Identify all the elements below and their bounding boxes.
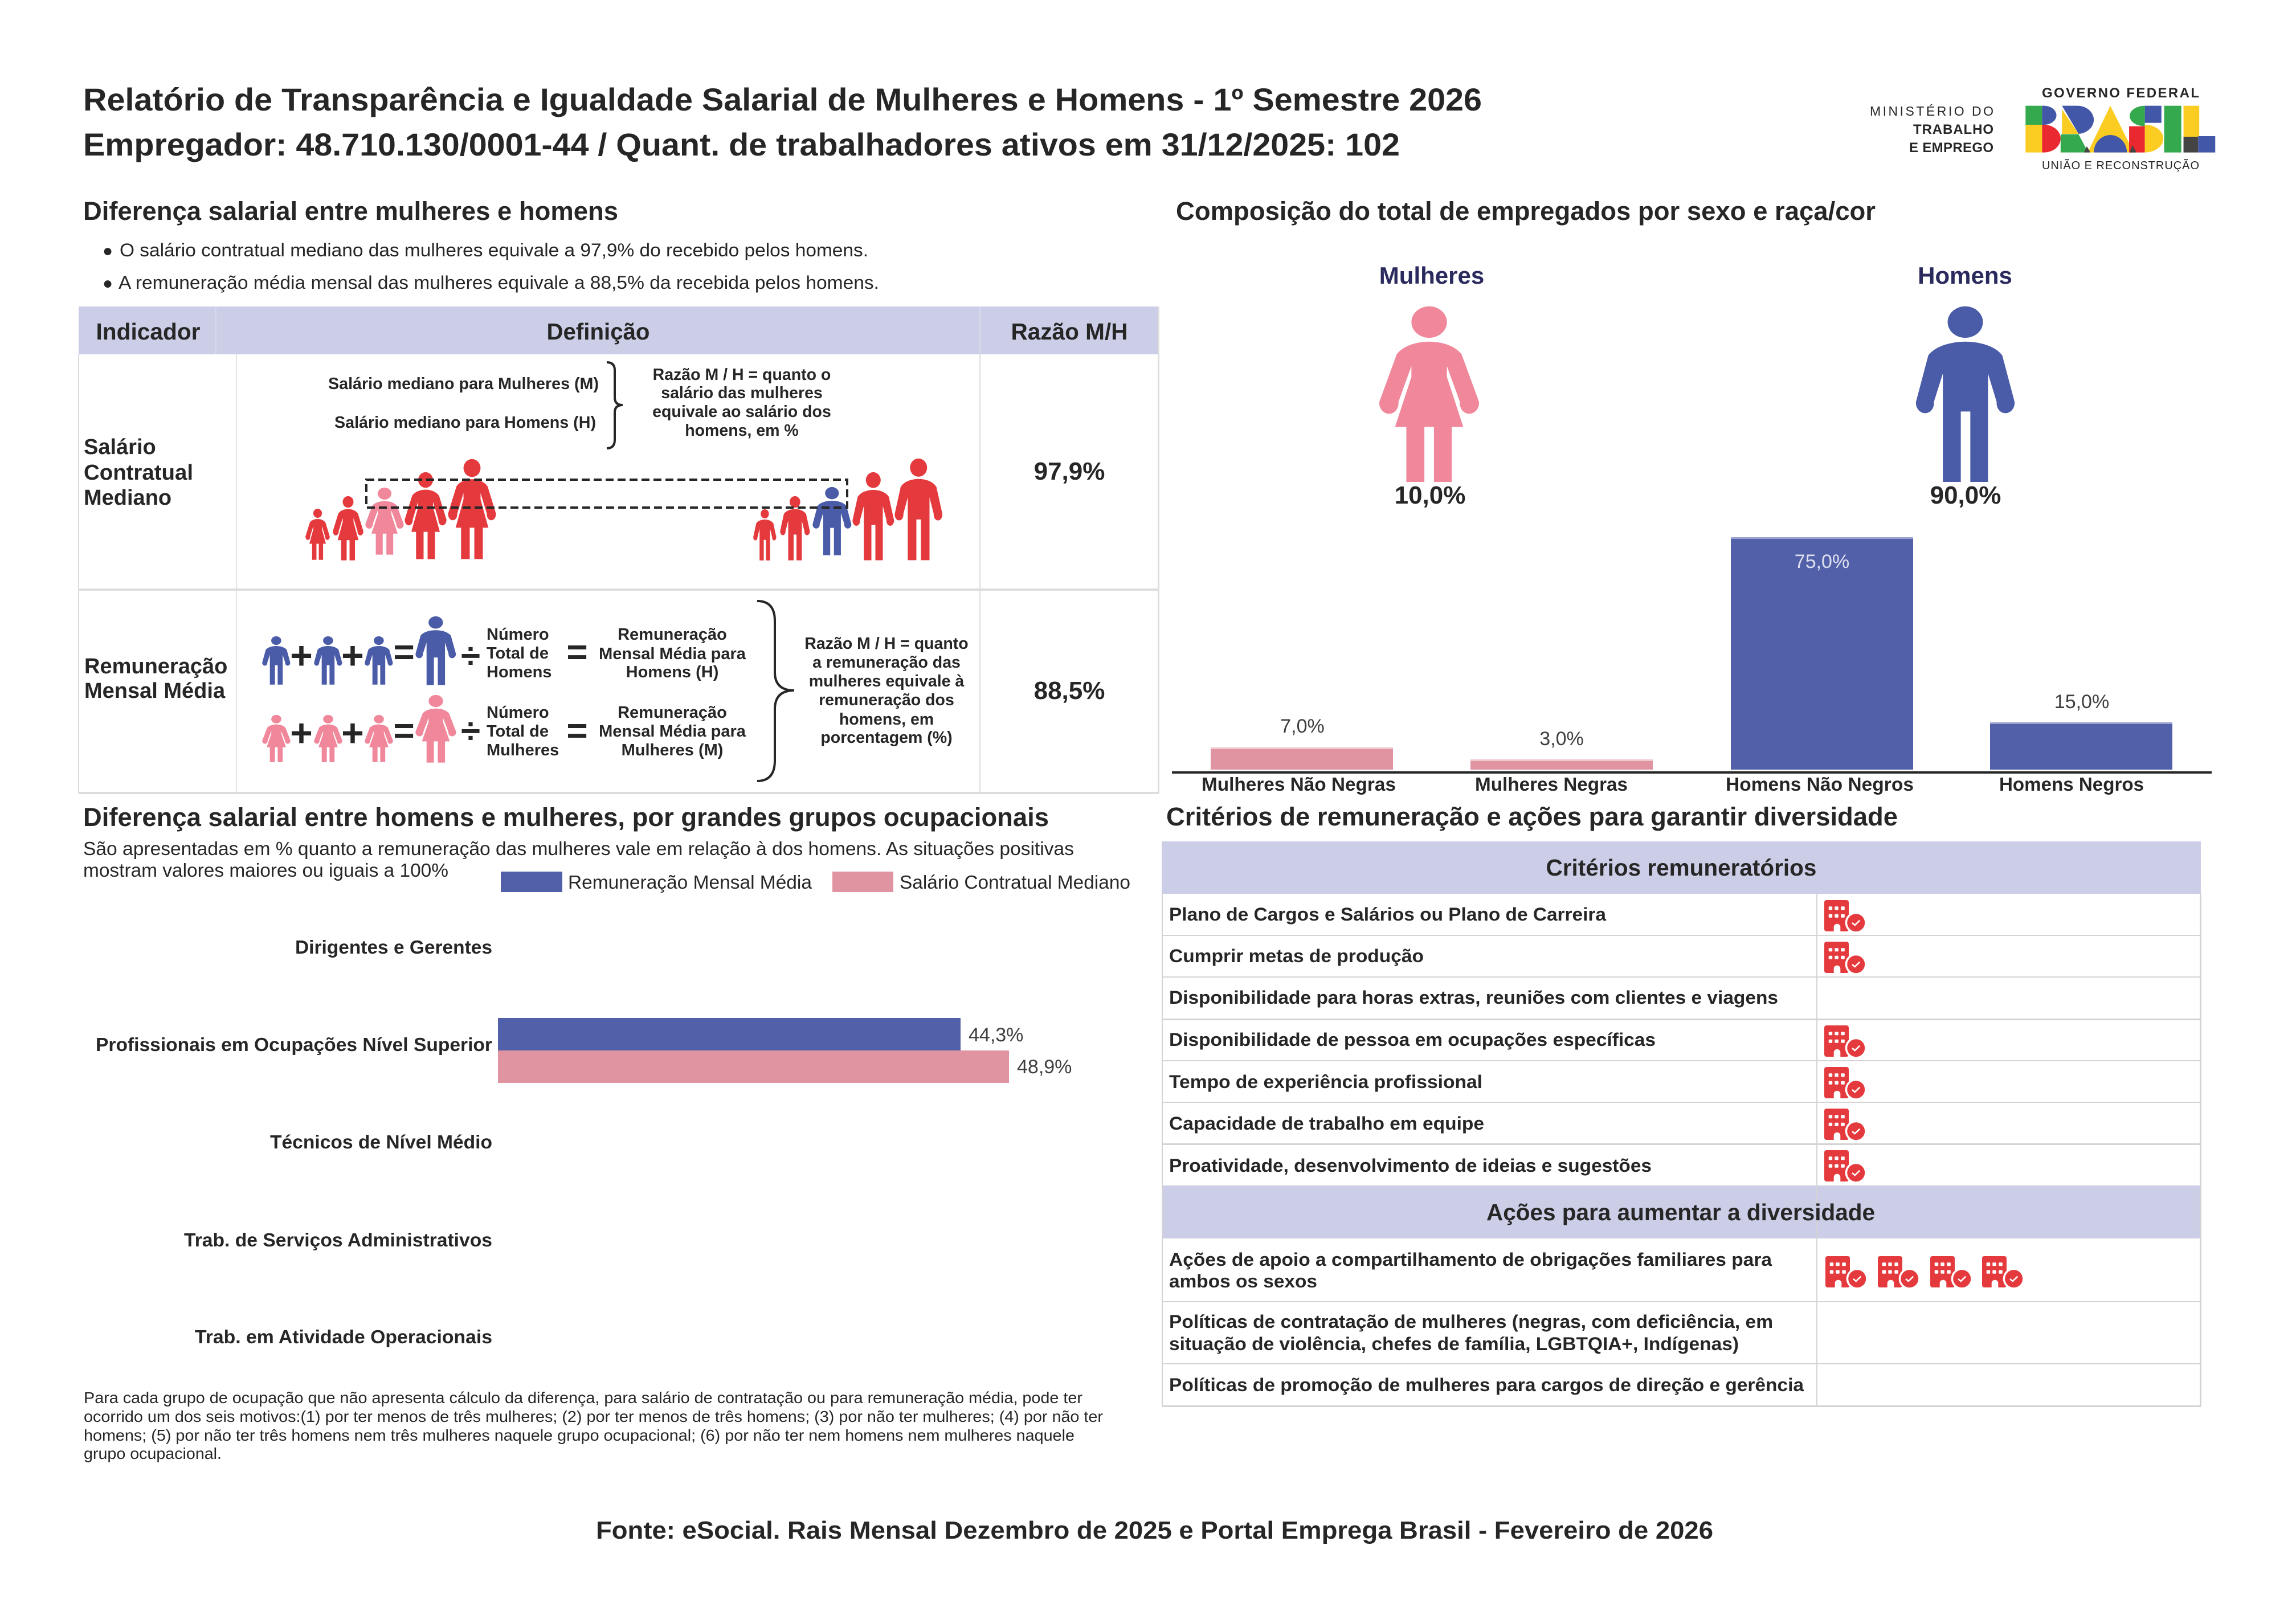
bar: mulheres não negras <box>1211 715 1393 770</box>
table header <box>79 306 1159 354</box>
row: cumprir metas <box>1169 942 1867 975</box>
definition: ratio text median: homens, em % <box>685 422 799 440</box>
bar: homens negros: 15,0% <box>2054 691 2109 713</box>
bar: remuneração 44,3%: 44,3% <box>969 1024 1023 1046</box>
formula: women: Mulheres <box>487 741 559 759</box>
row: políticas de contratação: Políticas de contratação de mulheres (negras, com deficiência, em <box>1169 1311 1773 1332</box>
row label: remuneração mensal média <box>84 655 227 703</box>
formula: men: + <box>341 634 364 677</box>
row: disponibilidade horas extras: Disponibilidade para horas extras, reuniões com clientes e viagens <box>1169 987 1778 1008</box>
row: tempo de experiência: Tempo de experiência profissional <box>1169 1072 1482 1092</box>
formula: men: + <box>290 634 313 677</box>
definition: ratio text average: a remuneração das <box>812 653 961 672</box>
formula: men: Total de <box>487 644 549 663</box>
footnote <box>84 1389 1103 1462</box>
bar: salário 48,9% <box>498 1050 1072 1083</box>
category labels <box>96 937 492 1347</box>
table header: Indicador <box>96 318 201 345</box>
value: 97,9%: 97,9% <box>1034 457 1105 485</box>
panel: homens pictogram: Homens <box>1918 262 2012 289</box>
heading: composição: Composição do total de empregados por sexo e raça/cor <box>1176 197 1876 226</box>
value: 88,5%: 88,5% <box>1034 677 1105 705</box>
bar: homens negros <box>1990 691 2172 770</box>
row: disponibilidade ocupações: Disponibilidade de pessoa em ocupações específicas <box>1169 1029 1656 1050</box>
row: tempo de experiência <box>1169 1067 1867 1101</box>
category labels: Trab. de Serviços Administrativos <box>184 1229 492 1250</box>
brace: average <box>757 601 794 781</box>
row: disponibilidade ocupações <box>1169 1025 1867 1059</box>
header: ações para aumentar a diversidade: Ações para aumentar a diversidade <box>1486 1199 1875 1225</box>
formula: women: Total de <box>487 722 549 741</box>
bar: mulheres negras: 3,0% <box>1539 728 1584 750</box>
definition: ratio text median: salário das mulheres <box>661 384 823 402</box>
formula: men <box>262 616 746 685</box>
row label: salário contratual mediano: Mediano <box>84 486 171 510</box>
footnote: homens; (5) por não ter três homens nem três mulheres naquele grupo ocupacional; (6) por não ter nem homens nem mulheres naquele <box>84 1426 1075 1444</box>
row label: remuneração mensal média: Mensal Média <box>84 679 226 703</box>
panel: indicator table <box>78 306 1159 794</box>
definition: median labels: Salário mediano para Mulheres (M) <box>328 375 599 393</box>
logo: governo federal brasil <box>2025 85 2215 172</box>
bar chart: composition <box>1172 537 2212 795</box>
formula: women: Remuneração <box>618 704 727 722</box>
legend <box>501 872 1130 893</box>
formula: women: Número <box>487 704 549 722</box>
row: plano de cargos: Plano de Cargos e Salários ou Plano de Carreira <box>1169 904 1606 925</box>
row: ações de apoio: ambos os sexos <box>1169 1271 1317 1291</box>
logo: ministério: TRABALHO <box>1913 122 1993 137</box>
category labels: Trab. em Atividade Operacionais <box>195 1326 492 1347</box>
row: políticas de contratação <box>1169 1311 1773 1354</box>
definition: ratio text average: porcentagem (%) <box>820 729 953 747</box>
formula: men: Mensal Média para <box>599 645 746 663</box>
category labels: Mulheres Não Negras <box>1202 774 1396 795</box>
heading: diferença salarial: Diferença salarial entre mulheres e homens <box>83 197 618 226</box>
bar: mulheres negras <box>1470 728 1653 770</box>
definition: ratio text median: Razão M / H = quanto o <box>653 366 831 384</box>
formula: women: = <box>393 710 415 751</box>
category labels: Homens Negros <box>1999 774 2144 795</box>
title: Relatório de Transparência e Igualdade Salarial de Mulheres e Homens - 1º Semestre 2026 <box>83 81 1482 117</box>
formula: women: + <box>341 712 364 755</box>
heading: grupos ocupacionais: Diferença salarial entre homens e mulheres, por grandes grupos ocupacionais <box>83 803 1049 832</box>
row: capacidade de trabalho: Capacidade de trabalho em equipe <box>1169 1113 1484 1134</box>
description text: São apresentadas em % quanto a remuneração das mulheres vale em relação à dos homens. As situações positivas <box>83 838 1074 859</box>
icons: men lined up <box>753 459 942 561</box>
bullet list: ● <box>103 274 113 293</box>
row: capacidade de trabalho <box>1169 1109 1867 1142</box>
dashed median box <box>366 480 847 508</box>
definition: ratio text average: remuneração dos <box>819 691 954 709</box>
bar chart: occupational groups <box>96 937 1072 1347</box>
definition: median labels <box>328 375 599 432</box>
formula: men: = <box>393 631 415 672</box>
definition: median labels: Salário mediano para Homens (H) <box>334 414 596 432</box>
row label: salário contratual mediano <box>84 435 193 510</box>
row label: salário contratual mediano: Salário <box>84 435 156 459</box>
row: ações de apoio: Ações de apoio a compartilhamento de obrigações familiares para <box>1169 1249 1772 1270</box>
formula: women <box>262 695 746 763</box>
panel: mulheres pictogram <box>1379 262 1484 509</box>
bar: salário 48,9%: 48,9% <box>1017 1056 1072 1078</box>
panel: homens pictogram: 90,0% <box>1930 481 2001 509</box>
formula: women: + <box>290 712 313 755</box>
row: proatividade <box>1169 1150 1867 1184</box>
category labels <box>1202 774 2144 795</box>
definition: ratio text average <box>804 635 969 747</box>
row: políticas de promoção: Políticas de promoção de mulheres para cargos de direção e gerência <box>1169 1375 1804 1395</box>
formula: women: Mensal Média para <box>599 722 746 741</box>
footnote: Para cada grupo de ocupação que não apresenta cálculo da diferença, para salário de contratação ou para remuneração média, pode ter <box>84 1389 1082 1407</box>
panel: mulheres pictogram: 10,0% <box>1395 481 1465 509</box>
formula: men: = <box>566 631 588 672</box>
row label: salário contratual mediano: Contratual <box>84 461 193 485</box>
row: plano de cargos <box>1169 900 1867 934</box>
category labels: Técnicos de Nível Médio <box>270 1131 492 1152</box>
table header: Razão M/H <box>1011 318 1128 345</box>
bullet list: A remuneração média mensal das mulheres equivale a 88,5% da recebida pelos homens. <box>119 272 879 293</box>
definition: ratio text average: mulheres equivale à <box>809 672 964 690</box>
definition: ratio text median: equivale ao salário dos <box>652 403 831 421</box>
row: ações de apoio <box>1169 1249 2025 1291</box>
icons: women lined up <box>305 459 496 561</box>
logo: ministério: MINISTÉRIO DO <box>1870 104 1993 118</box>
heading: critérios de remuneração: Critérios de remuneração e ações para garantir diversidade <box>1166 802 1898 831</box>
legend: Remuneração Mensal Média <box>568 872 812 893</box>
description text: mostram valores maiores ou iguais a 100% <box>83 860 448 881</box>
category labels: Dirigentes e Gerentes <box>295 937 492 958</box>
bullet list: O salário contratual mediano das mulheres equivale a 97,9% do recebido pelos homens. <box>120 240 868 260</box>
table header: Definição <box>547 318 649 345</box>
title <box>83 81 1482 162</box>
row: cumprir metas: Cumprir metas de produção <box>1169 946 1424 966</box>
definition: ratio text average: Razão M / H = quanto <box>804 635 969 653</box>
bar: mulheres não negras: 7,0% <box>1280 715 1325 737</box>
formula: men: Remuneração <box>618 625 727 644</box>
description text <box>83 838 1074 881</box>
logo: ministério: E EMPREGO <box>1909 140 1993 156</box>
category labels: Mulheres Negras <box>1475 774 1628 795</box>
logo: ministério <box>1870 104 1993 156</box>
bar: homens não negros: 75,0% <box>1795 551 1849 573</box>
row label: remuneração mensal média: Remuneração <box>84 655 227 678</box>
bullet list: ● <box>103 242 113 260</box>
brace: median <box>607 362 623 448</box>
logo: governo federal brasil: UNIÃO E RECONSTRUÇÃO <box>2042 158 2199 172</box>
source note: Fonte: eSocial. Rais Mensal Dezembro de 2025 e Portal Emprega Brasil - Fevereiro de 2026 <box>596 1516 1713 1544</box>
definition: ratio text average: homens, em <box>839 710 934 729</box>
panel: criteria table <box>1162 841 2201 1407</box>
formula: men: Homens <box>487 663 551 681</box>
formula: men: Homens (H) <box>626 663 718 681</box>
definition: ratio text median <box>652 366 831 440</box>
formula: women: = <box>566 710 588 751</box>
bullet list <box>103 240 879 293</box>
footnote: ocorrido um dos seis motivos:(1) por ter menos de três mulheres; (2) por ter menos de três homens; (3) por não ter mulheres; (4) por não ter <box>84 1408 1103 1425</box>
legend: Salário Contratual Mediano <box>900 872 1130 893</box>
formula: men: ÷ <box>461 636 480 676</box>
category labels: Homens Não Negros <box>1726 774 1914 795</box>
panel: homens pictogram <box>1916 262 2015 509</box>
formula: women: ÷ <box>461 712 480 751</box>
category labels: Profissionais em Ocupações Nível Superior <box>96 1034 492 1055</box>
footnote: grupo ocupacional. <box>84 1445 222 1462</box>
panel: mulheres pictogram: Mulheres <box>1379 262 1484 289</box>
title: Empregador: 48.710.130/0001-44 / Quant. de trabalhadores ativos em 31/12/2025: 102 <box>83 126 1400 162</box>
bar: homens não negros <box>1731 537 1913 770</box>
header: critérios remuneratórios: Critérios remuneratórios <box>1546 854 1816 881</box>
row: proatividade: Proatividade, desenvolvimento de ideias e sugestões <box>1169 1155 1652 1176</box>
bar: remuneração 44,3% <box>498 1018 1023 1050</box>
formula: women: Mulheres (M) <box>622 741 723 759</box>
row: políticas de contratação: situação de violência, chefes de família, LGBTQIA+, Indígenas) <box>1169 1334 1739 1354</box>
formula: men: Número <box>487 625 549 644</box>
logo: governo federal brasil: GOVERNO FEDERAL <box>2042 85 2199 101</box>
